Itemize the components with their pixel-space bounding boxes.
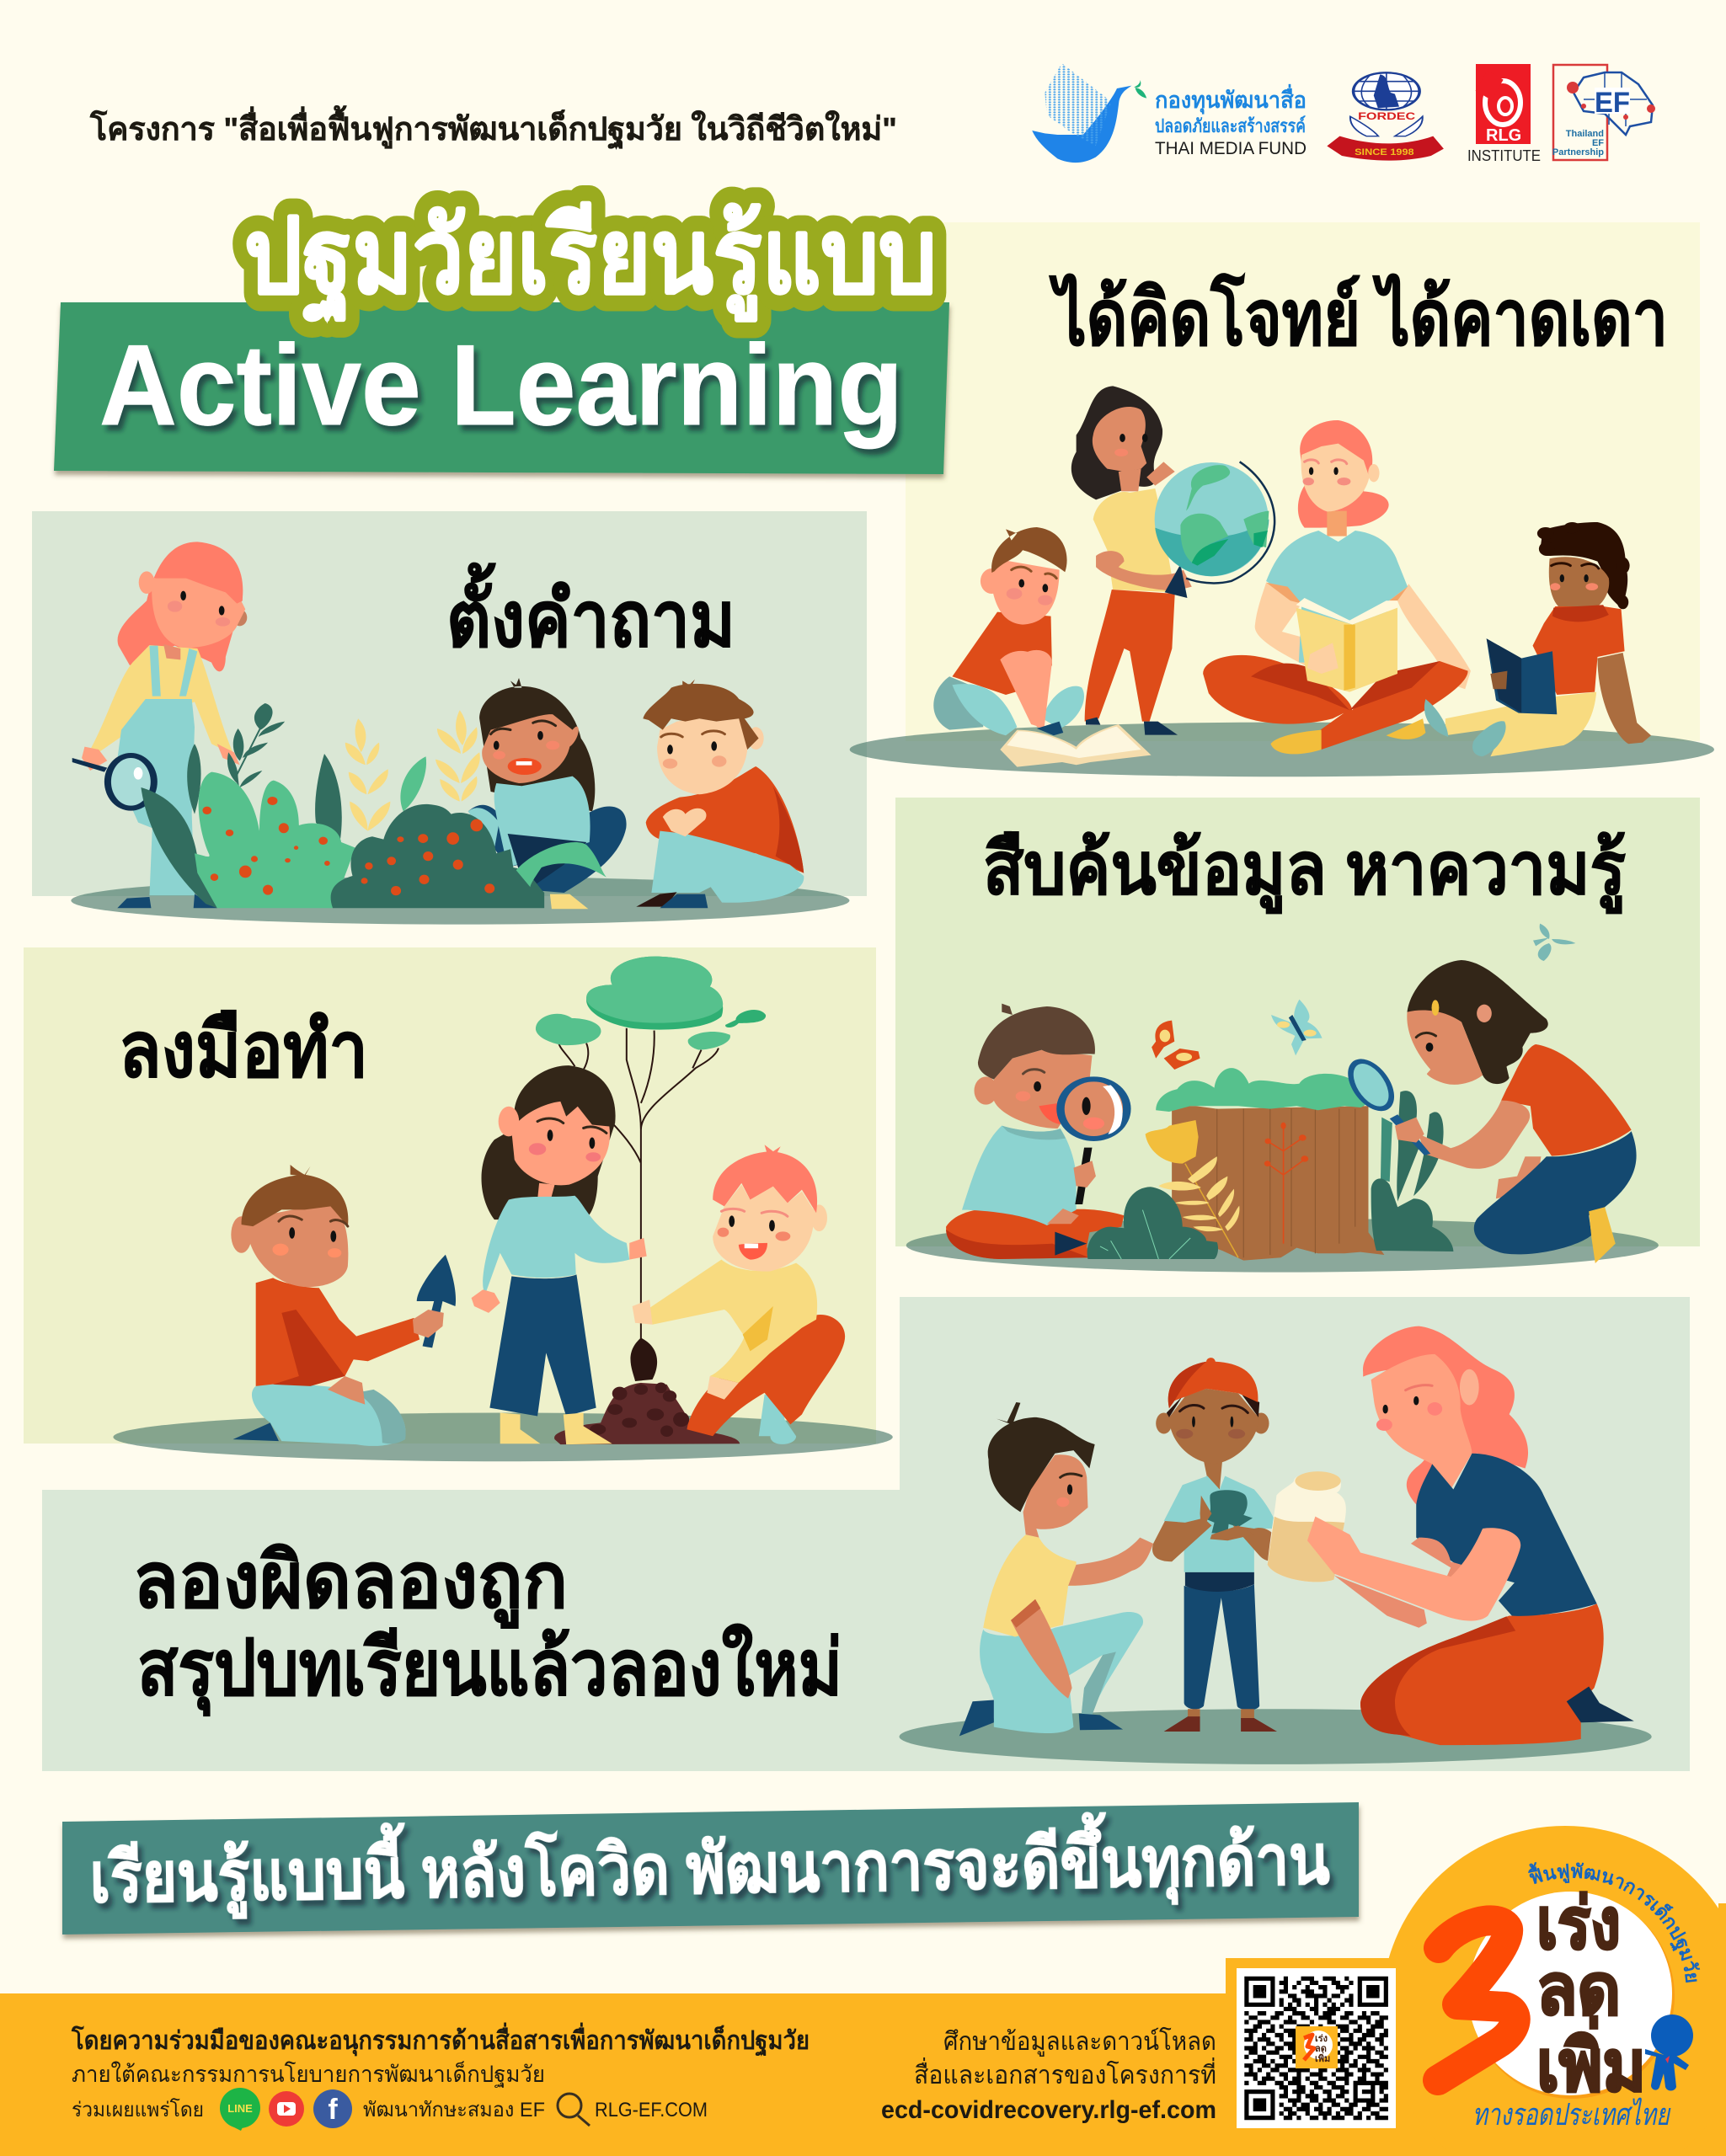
glass jar [1268, 1471, 1346, 1582]
QR centre logo: ลด [1315, 2044, 1327, 2054]
heading: trial and error: ลองผิดลองถูก [133, 1538, 568, 1629]
panel: ask questions [32, 511, 867, 896]
illustration: children and teacher with frog [900, 1326, 1652, 1764]
circular campaign logo [1388, 1826, 1726, 2132]
logo: Thailand EF Partnership: Thailand [1566, 129, 1604, 139]
words: speed up, reduce, increase: เพิ่ม [1536, 2016, 1646, 2105]
logo: Thai Media Fund: กองทุนพัฒนาสื่อ [1155, 83, 1307, 115]
illustration: children exploring plants [71, 542, 849, 925]
girl holding sapling [472, 1065, 647, 1444]
icon: YouTube [269, 2091, 304, 2127]
sapling [536, 957, 766, 1444]
title: early childhood learning style: ปฐมวัยเรียนรู้แบบ [244, 199, 937, 324]
boy with salmon hair [633, 1145, 845, 1444]
footer right text: ecd-covidrecovery.rlg-ef.com [881, 2096, 1216, 2124]
girl with magnifier [1339, 960, 1637, 1263]
footer right text: สื่อและเอกสารของโครงการที่ [914, 2057, 1216, 2089]
icon: Facebook: f [328, 2094, 338, 2126]
globe [1155, 462, 1274, 598]
footer left text: ภายใต้คณะกรรมการนโยบายการพัฒนาเด็กปฐมวัย [72, 2059, 545, 2088]
big number three [1438, 1920, 1515, 2080]
plants [141, 703, 607, 908]
icon: Facebook [313, 2089, 352, 2128]
logo: RLG Institute [1467, 64, 1541, 164]
icon: magnifier [558, 2094, 590, 2126]
footer left text [71, 2022, 810, 2131]
illustration: children with globe and books [850, 386, 1714, 776]
girl crouching [468, 678, 627, 909]
QR centre logo: เพิ่ม [1315, 2052, 1330, 2064]
icon: LINE: LINE [227, 2102, 253, 2115]
footer right text: ศึกษาข้อมูลและดาวน์โหลด [943, 2026, 1216, 2057]
boy with magnifier [946, 1004, 1131, 1259]
woman reading [1203, 420, 1471, 754]
boy with frog [1152, 1358, 1285, 1732]
logo: Thai Media Fund: THAI MEDIA FUND [1155, 139, 1307, 158]
QR code [1237, 1968, 1396, 2128]
title: early childhood learning style [54, 199, 949, 474]
teacher [1307, 1326, 1634, 1745]
logo: Thai Media Fund [1032, 63, 1307, 163]
dragonfly [1533, 924, 1575, 961]
panel: search for information [895, 798, 1700, 1246]
title: Active Learning: Active Learning [99, 321, 903, 449]
illustration: children planting a tree [113, 957, 893, 1461]
girl with overalls and magnifier [72, 542, 247, 908]
banner: development improves [62, 1802, 1359, 1935]
child with book [1424, 522, 1651, 756]
logo: Thailand EF Partnership: EF [1595, 87, 1630, 119]
logo: Thai Media Fund: ปลอดภัยและสร้างสรรค์ [1155, 115, 1306, 136]
boy sitting with knees up [636, 680, 804, 908]
footer left text: ร่วมเผยแพร่โดย [72, 2098, 204, 2121]
logo: FORDEC: FORDEC [1358, 111, 1415, 122]
boy sitting [933, 527, 1152, 767]
words: speed up, reduce, increase [1536, 1884, 1646, 2105]
logo: Thailand EF Partnership: Partnership [1552, 147, 1604, 157]
logo: RLG Institute: RLG [1486, 126, 1521, 145]
QR centre logo [1296, 2026, 1338, 2068]
words: speed up, reduce, increase: ลด [1536, 1950, 1621, 2029]
panel: think up questions (top right) [906, 222, 1700, 741]
panel: hands-on [24, 947, 876, 1444]
logo: FORDEC [1327, 72, 1444, 161]
QR centre logo: เร่ง [1315, 2034, 1328, 2044]
icon: LINE [220, 2088, 260, 2131]
green title box [54, 302, 949, 474]
banner: development improves: เรียนรู้แบบนี้ หลังโควิด พัฒนาการจะดีขึ้นทุกด้าน [89, 1808, 1330, 1921]
panel: trial and error [42, 1297, 1690, 1771]
heading: do it yourself: ลงมือทำ [119, 1007, 368, 1093]
logo: Thailand EF Partnership [1552, 65, 1655, 160]
slogan: Thailand's way out: ทางรอดประเทศไทย [1472, 2097, 1671, 2132]
illustration: children observing a tree stump [906, 924, 1659, 1273]
boy with trowel [231, 1165, 456, 1446]
logo: FORDEC: SINCE 1998 [1355, 147, 1414, 157]
curved slogan [1531, 1878, 1686, 2009]
footer left text: RLG-EF.COM [595, 2099, 708, 2121]
butterflies [1152, 1000, 1323, 1070]
boy kneeling [959, 1402, 1153, 1736]
heading: research: สืบค้นข้อมูล หาความรู้ [983, 829, 1626, 914]
blue mascot [1645, 2015, 1693, 2090]
title: early childhood learning style: ปฐมวัยเรียนรู้แบบ [244, 199, 937, 324]
logo: RLG Institute: INSTITUTE [1467, 147, 1541, 164]
heading: ask questions: ตั้งคำถาม [446, 563, 735, 663]
footer left text: พัฒนาทักษะสมอง EF [363, 2099, 545, 2121]
tree stump and plants [1087, 1068, 1453, 1261]
circular campaign logo: ฟื้นฟูพัฒนาการเด็กปฐมวัย [1528, 1861, 1700, 1983]
logo: Thailand EF Partnership: EF [1592, 138, 1604, 148]
footer right text [881, 2026, 1216, 2124]
header project title: โครงการ "สื่อเพื่อฟื้นฟูการพัฒนาเด็กปฐมวัย ในวิถีชีวิตใหม่" [89, 105, 897, 150]
heading: conclude and retry: สรุปบทเรียนแล้วลองใหม่ [137, 1624, 842, 1716]
words: speed up, reduce, increase: เร่ง [1536, 1884, 1621, 1963]
girl with globe [1071, 386, 1192, 735]
footer left text: โดยความร่วมมือของคณะอนุกรรมการด้านสื่อสารเพื่อการพัฒนาเด็กปฐมวัย [71, 2022, 810, 2057]
footer bar [0, 1958, 1726, 2156]
